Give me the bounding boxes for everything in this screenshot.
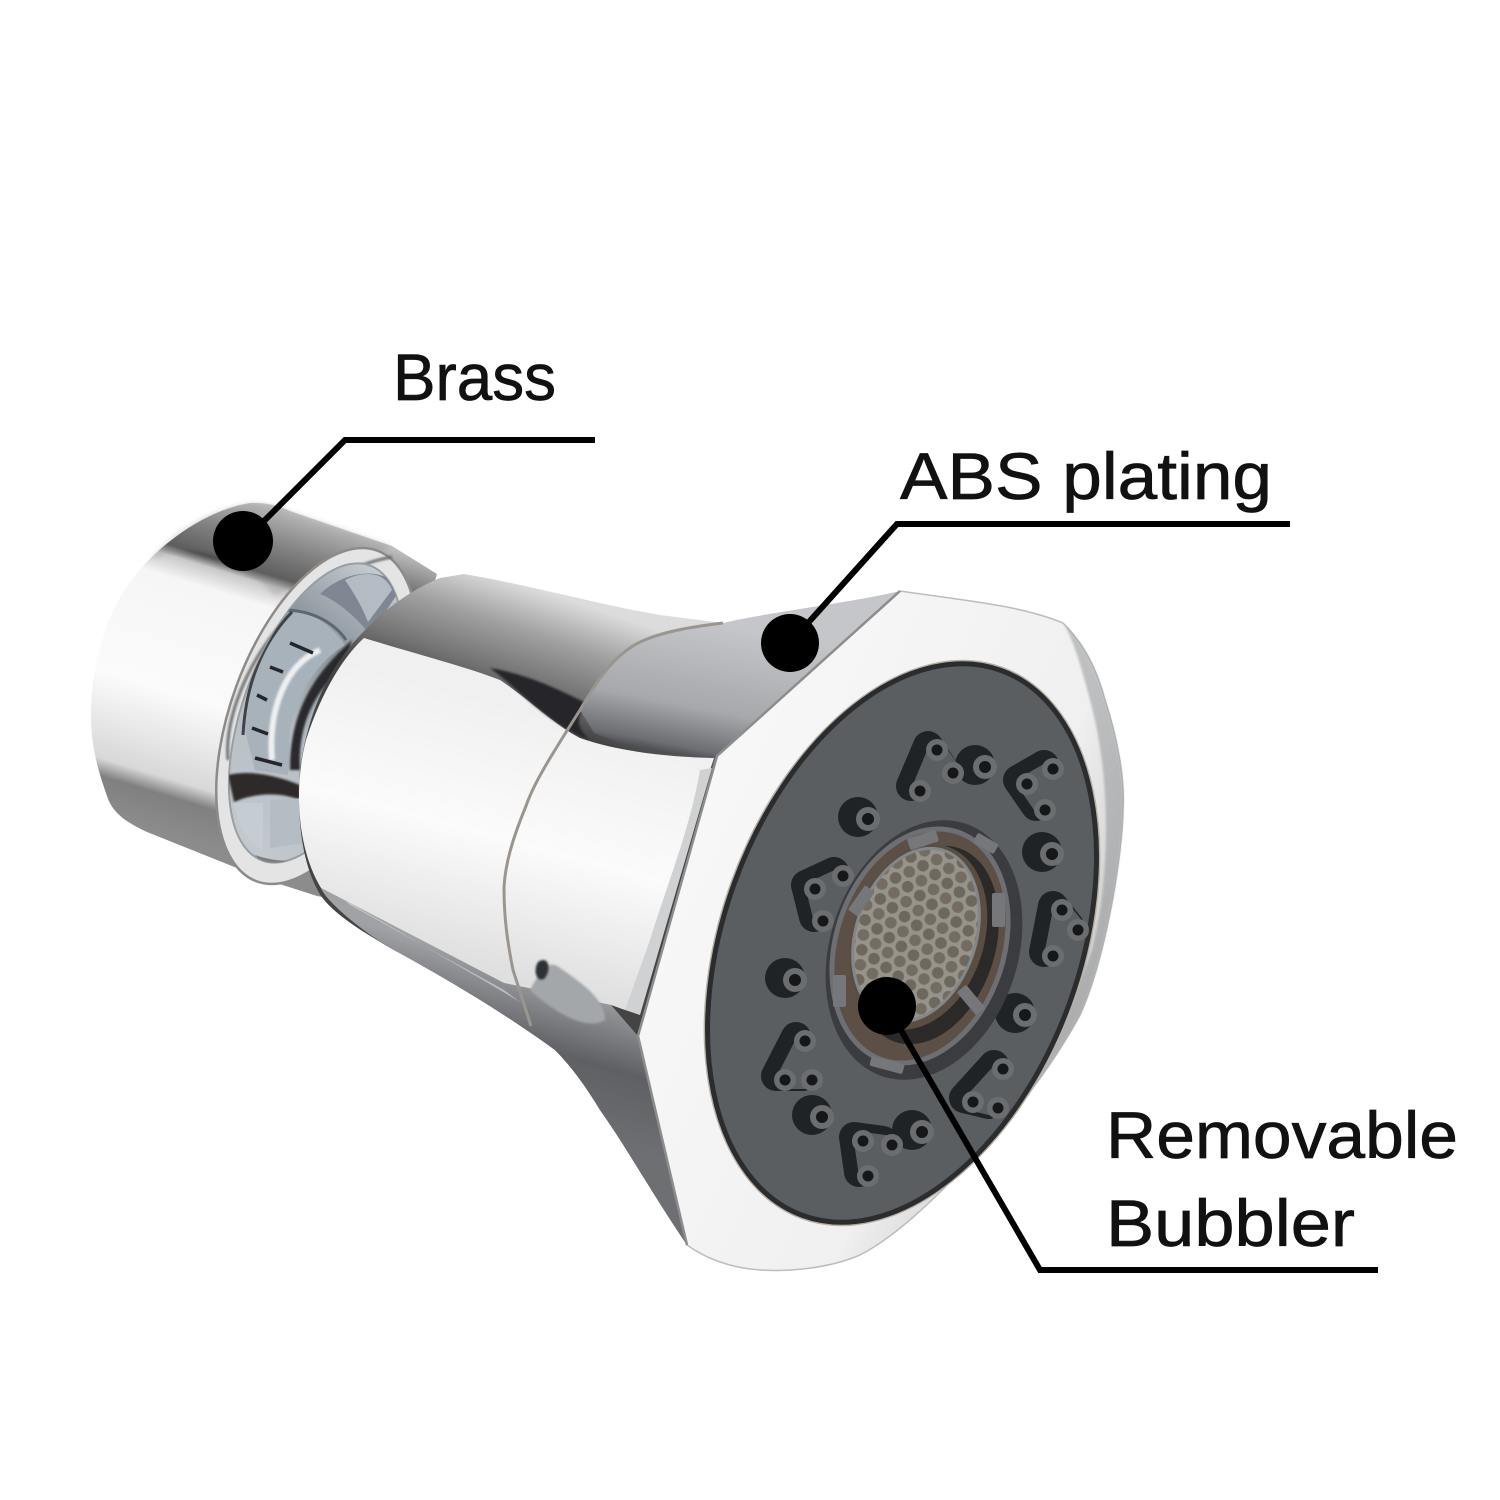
leader line: Removable Bubbler	[887, 1006, 1378, 1270]
removable bubbler	[794, 794, 1054, 1106]
front hexagonal head	[638, 591, 1123, 1270]
spray nozzles: triple clusters	[774, 739, 1089, 1187]
leader line: ABS plating	[790, 524, 1290, 643]
callout: Removable Bubbler	[858, 977, 1458, 1270]
swivel ring and joint	[215, 546, 412, 886]
main tapered body	[299, 574, 900, 1245]
spray face disc	[630, 604, 1174, 1282]
back brass cap	[91, 503, 437, 900]
label: Removable: Removable	[1106, 1098, 1458, 1172]
marker dot: Removable Bubbler	[858, 977, 916, 1035]
label: Brass: Brass	[393, 340, 556, 414]
spray nozzles: singles	[765, 745, 1064, 1150]
marker dot: ABS plating	[761, 614, 819, 672]
label: Bubbler: Bubbler	[1106, 1186, 1355, 1260]
callout: ABS plating	[761, 439, 1290, 672]
label: ABS plating: ABS plating	[900, 439, 1272, 513]
marker dot: Brass	[213, 511, 273, 571]
callout: Brass	[213, 340, 595, 571]
product photo: chrome aerator head	[91, 503, 1174, 1282]
collar seam line	[504, 623, 723, 1026]
leader line: Brass	[243, 440, 595, 542]
